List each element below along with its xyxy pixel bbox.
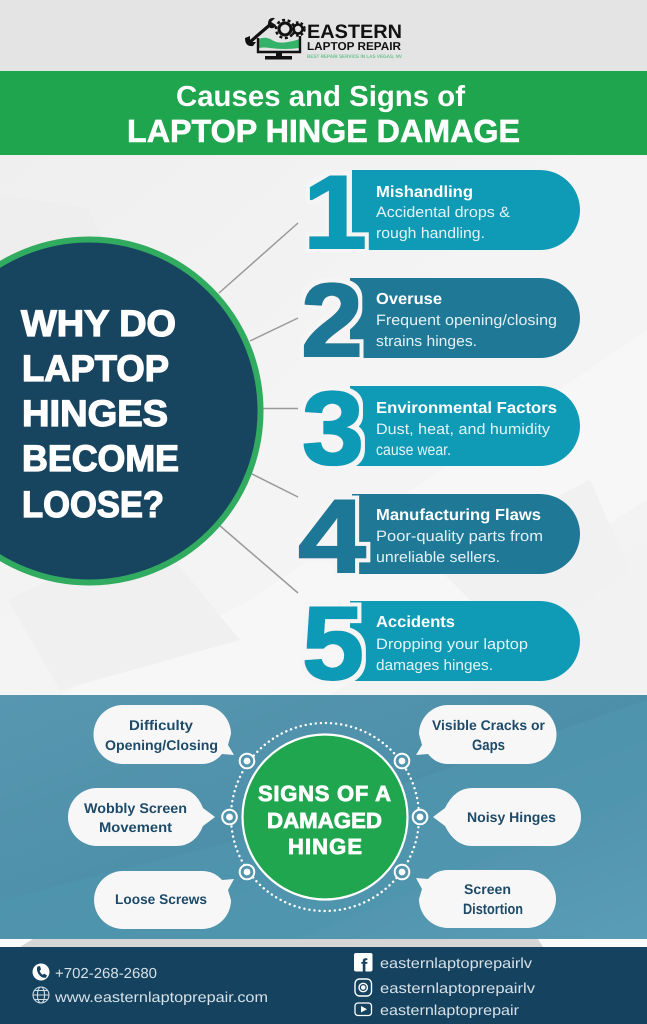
- logo: [245, 18, 403, 60]
- title line 2: LAPTOP HINGE DAMAGE: [127, 113, 520, 149]
- central circle: signs of a damaged hinge: [242, 734, 408, 900]
- cause 5: accidents: Dropping your laptop: [376, 636, 528, 653]
- cause 2: overuse: Overuse: [376, 291, 442, 308]
- bubble: visible cracks or gaps: Visible Cracks or: [432, 717, 546, 733]
- cause 5: accidents: Accidents: [376, 614, 455, 631]
- cause 1: mishandling: 1: [303, 155, 367, 271]
- cause 1: mishandling: rough handling.: [376, 225, 485, 242]
- bubble: visible cracks or gaps: [416, 705, 556, 764]
- cause 4: manufacturing flaws: [298, 479, 580, 595]
- header background: [0, 0, 647, 71]
- main circle: why do laptop hinges become loose: WHY DO: [21, 303, 176, 344]
- central circle: signs of a damaged hinge: DAMAGED: [267, 808, 382, 833]
- cause 3: environmental factors: Dust, heat, and humidity: [376, 421, 551, 438]
- bubble: wobbly screen movement: Wobbly Screen: [84, 800, 187, 816]
- bubble: screen distortion: Distortion: [463, 901, 523, 918]
- divider strip: [0, 939, 647, 947]
- icon: facebook: [354, 953, 372, 977]
- logo: EASTERN: [307, 21, 402, 43]
- cause 3: environmental factors: [302, 371, 580, 487]
- title line 1: Causes and Signs of: [176, 81, 465, 113]
- cause 4: manufacturing flaws: unreliable sellers.: [376, 549, 500, 566]
- central circle: signs of a damaged hinge: SIGNS OF A: [258, 781, 391, 806]
- website: www.easternlaptoprepair.com: [54, 990, 268, 1006]
- icon: phone: [32, 964, 50, 980]
- connector lines: [219, 223, 298, 593]
- main circle: why do laptop hinges become loose: LOOSE?: [22, 484, 164, 525]
- dotted ring: [231, 723, 419, 911]
- bubble: wobbly screen movement: Movement: [99, 819, 172, 835]
- main circle: why do laptop hinges become loose: HINGES: [22, 393, 168, 434]
- icon: instagram: [355, 979, 372, 996]
- cause 4: manufacturing flaws: Manufacturing Flaws: [376, 507, 541, 524]
- instagram handle: easternlaptoprepairlv: [380, 981, 536, 997]
- icon: globe: [33, 987, 49, 1003]
- bubble: noisy hinges: [433, 788, 581, 846]
- cause 3: environmental factors: Environmental Factors: [376, 400, 557, 417]
- youtube handle: easternlaptoprepair: [380, 1003, 519, 1019]
- bubble: loose screws: [94, 871, 234, 929]
- bubble: noisy hinges: Noisy Hinges: [467, 809, 556, 825]
- cause 2: overuse: strains hinges.: [376, 333, 477, 350]
- footer: [0, 947, 647, 1024]
- bubble: wobbly screen movement: [68, 788, 215, 846]
- phone number: +702-268-2680: [55, 966, 157, 982]
- logo: LAPTOP REPAIR: [307, 41, 402, 53]
- logo: BEST REPAIR SERVICE IN LAS VEGAS, NV: [307, 54, 403, 60]
- bubble: screen distortion: [416, 870, 556, 928]
- icon: youtube: [355, 1003, 372, 1016]
- title band: [0, 71, 647, 155]
- cause 3: environmental factors: cause wear.: [376, 442, 451, 459]
- bubble: screen distortion: Screen: [464, 881, 511, 897]
- main circle: why do laptop hinges become loose: LAPTOP: [22, 348, 169, 389]
- cause 5: accidents: [302, 586, 580, 702]
- ring nodes: [222, 754, 427, 879]
- bubble: difficulty opening/closing: [94, 705, 234, 764]
- cause 2: overuse: 2: [301, 263, 363, 379]
- signs section background: [0, 695, 647, 939]
- cause 4: manufacturing flaws: 4: [298, 479, 366, 595]
- bubble: difficulty opening/closing: Difficulty: [129, 717, 193, 733]
- cause 1: mishandling: [303, 155, 580, 271]
- cause 2: overuse: Frequent opening/closing: [376, 312, 557, 329]
- cause 1: mishandling: Accidental drops &: [376, 204, 510, 221]
- cause 5: accidents: damages hinges.: [376, 657, 493, 674]
- cause 4: manufacturing flaws: Poor-quality parts from: [376, 528, 543, 545]
- icon: facebook: f: [361, 956, 368, 977]
- bubble: visible cracks or gaps: Gaps: [472, 737, 505, 754]
- central circle: signs of a damaged hinge: HINGE: [288, 834, 362, 859]
- bubble: difficulty opening/closing: Opening/Closing: [105, 737, 218, 753]
- cause 3: environmental factors: 3: [302, 371, 364, 487]
- main circle: why do laptop hinges become loose: BECOME: [22, 438, 179, 479]
- causes section background: [0, 155, 647, 695]
- cause 5: accidents: 5: [302, 586, 364, 702]
- cause 1: mishandling: Mishandling: [376, 184, 473, 201]
- main circle: why do laptop hinges become loose: [0, 240, 260, 582]
- facebook handle: easternlaptoprepairlv: [380, 956, 533, 972]
- bubble: loose screws: Loose Screws: [115, 891, 207, 907]
- cause 2: overuse: [301, 263, 580, 379]
